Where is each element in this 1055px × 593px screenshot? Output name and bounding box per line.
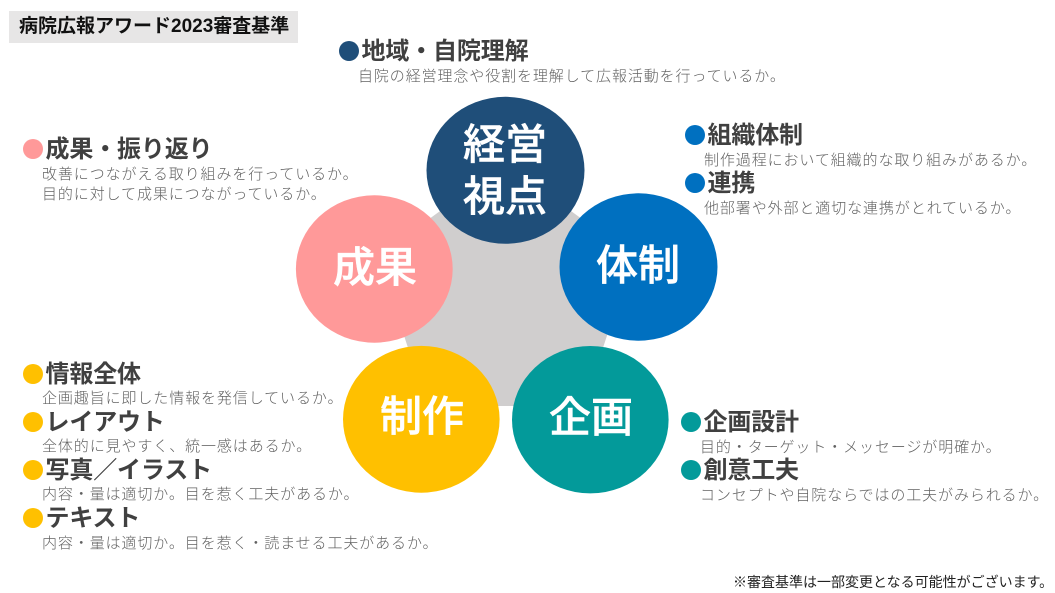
criteria: 成果・振り返り: 成果・振り返り <box>46 136 212 163</box>
criteria: 地域・自院理解 <box>339 38 786 85</box>
criteria: 地域・自院理解: 自院の経営理念や役割を理解して広報活動を行っているか。 <box>358 68 786 85</box>
title <box>9 11 298 43</box>
circle: 制作 <box>343 346 500 493</box>
criteria: 写真／イラスト <box>23 457 359 503</box>
criteria: 情報全体: 情報全体 <box>46 361 141 388</box>
criteria: 写真／イラスト: 写真／イラスト <box>46 457 212 484</box>
criteria: 情報全体 <box>23 361 343 407</box>
criteria: レイアウト: 全体的に見やすく、統一感はあるか。 <box>42 438 312 455</box>
criteria: 連携 <box>685 170 1021 217</box>
criteria: テキスト <box>23 505 438 552</box>
criteria: 連携: 連携 <box>708 170 755 197</box>
circle: 経営視点 <box>426 97 584 244</box>
criteria: 連携: 他部署や外部と適切な連携がとれているか。 <box>704 200 1021 217</box>
circle: 成果: 成果 <box>333 244 417 291</box>
criteria: 組織体制: 制作過程において組織的な取り組みがあるか。 <box>704 152 1037 169</box>
criteria: テキスト: 内容・量は適切か。目を惹く・読ませる工夫があるか。 <box>42 535 438 552</box>
title: 病院広報アワード2023審査基準 <box>19 16 289 37</box>
criteria: 創意工夫 <box>681 457 1049 504</box>
criteria: 成果・振り返り: 目的に対して成果につながっているか。 <box>42 186 327 203</box>
criteria: 創意工夫: コンセプトや自院ならではの工夫がみられるか。 <box>700 487 1049 504</box>
criteria: 情報全体: 企画趣旨に即した情報を発信しているか。 <box>42 390 343 407</box>
criteria: 写真／イラスト: 内容・量は適切か。目を惹く工夫があるか。 <box>42 486 359 503</box>
circle: 成果 <box>296 195 453 343</box>
criteria: レイアウト <box>23 409 312 455</box>
circle: 企画: 企画 <box>549 394 633 441</box>
pentagon background <box>378 164 633 406</box>
footnote: ※審査基準は一部変更となる可能性がございます。 <box>733 574 1053 590</box>
criteria: 地域・自院理解: 地域・自院理解 <box>362 38 528 65</box>
criteria: テキスト: テキスト <box>46 505 140 532</box>
criteria: 創意工夫: 創意工夫 <box>704 457 799 484</box>
criteria: レイアウト: レイアウト <box>46 409 165 436</box>
criteria: 企画設計: 企画設計 <box>704 409 799 436</box>
circle: 経営視点: 経営 <box>463 121 547 168</box>
criteria: 成果・振り返り <box>23 136 359 203</box>
circle: 体制 <box>560 193 718 341</box>
criteria: 企画設計 <box>681 409 1002 456</box>
criteria: 組織体制 <box>685 122 1037 169</box>
circle: 経営視点: 視点 <box>463 173 547 220</box>
criteria: 組織体制: 組織体制 <box>708 122 803 149</box>
circle: 制作: 制作 <box>380 393 464 440</box>
circle: 企画 <box>512 346 669 493</box>
criteria: 企画設計: 目的・ターゲット・メッセージが明確か。 <box>700 439 1002 456</box>
criteria: 成果・振り返り: 改善につながえる取り組みを行っているか。 <box>42 166 359 183</box>
circle: 体制: 体制 <box>596 242 680 289</box>
